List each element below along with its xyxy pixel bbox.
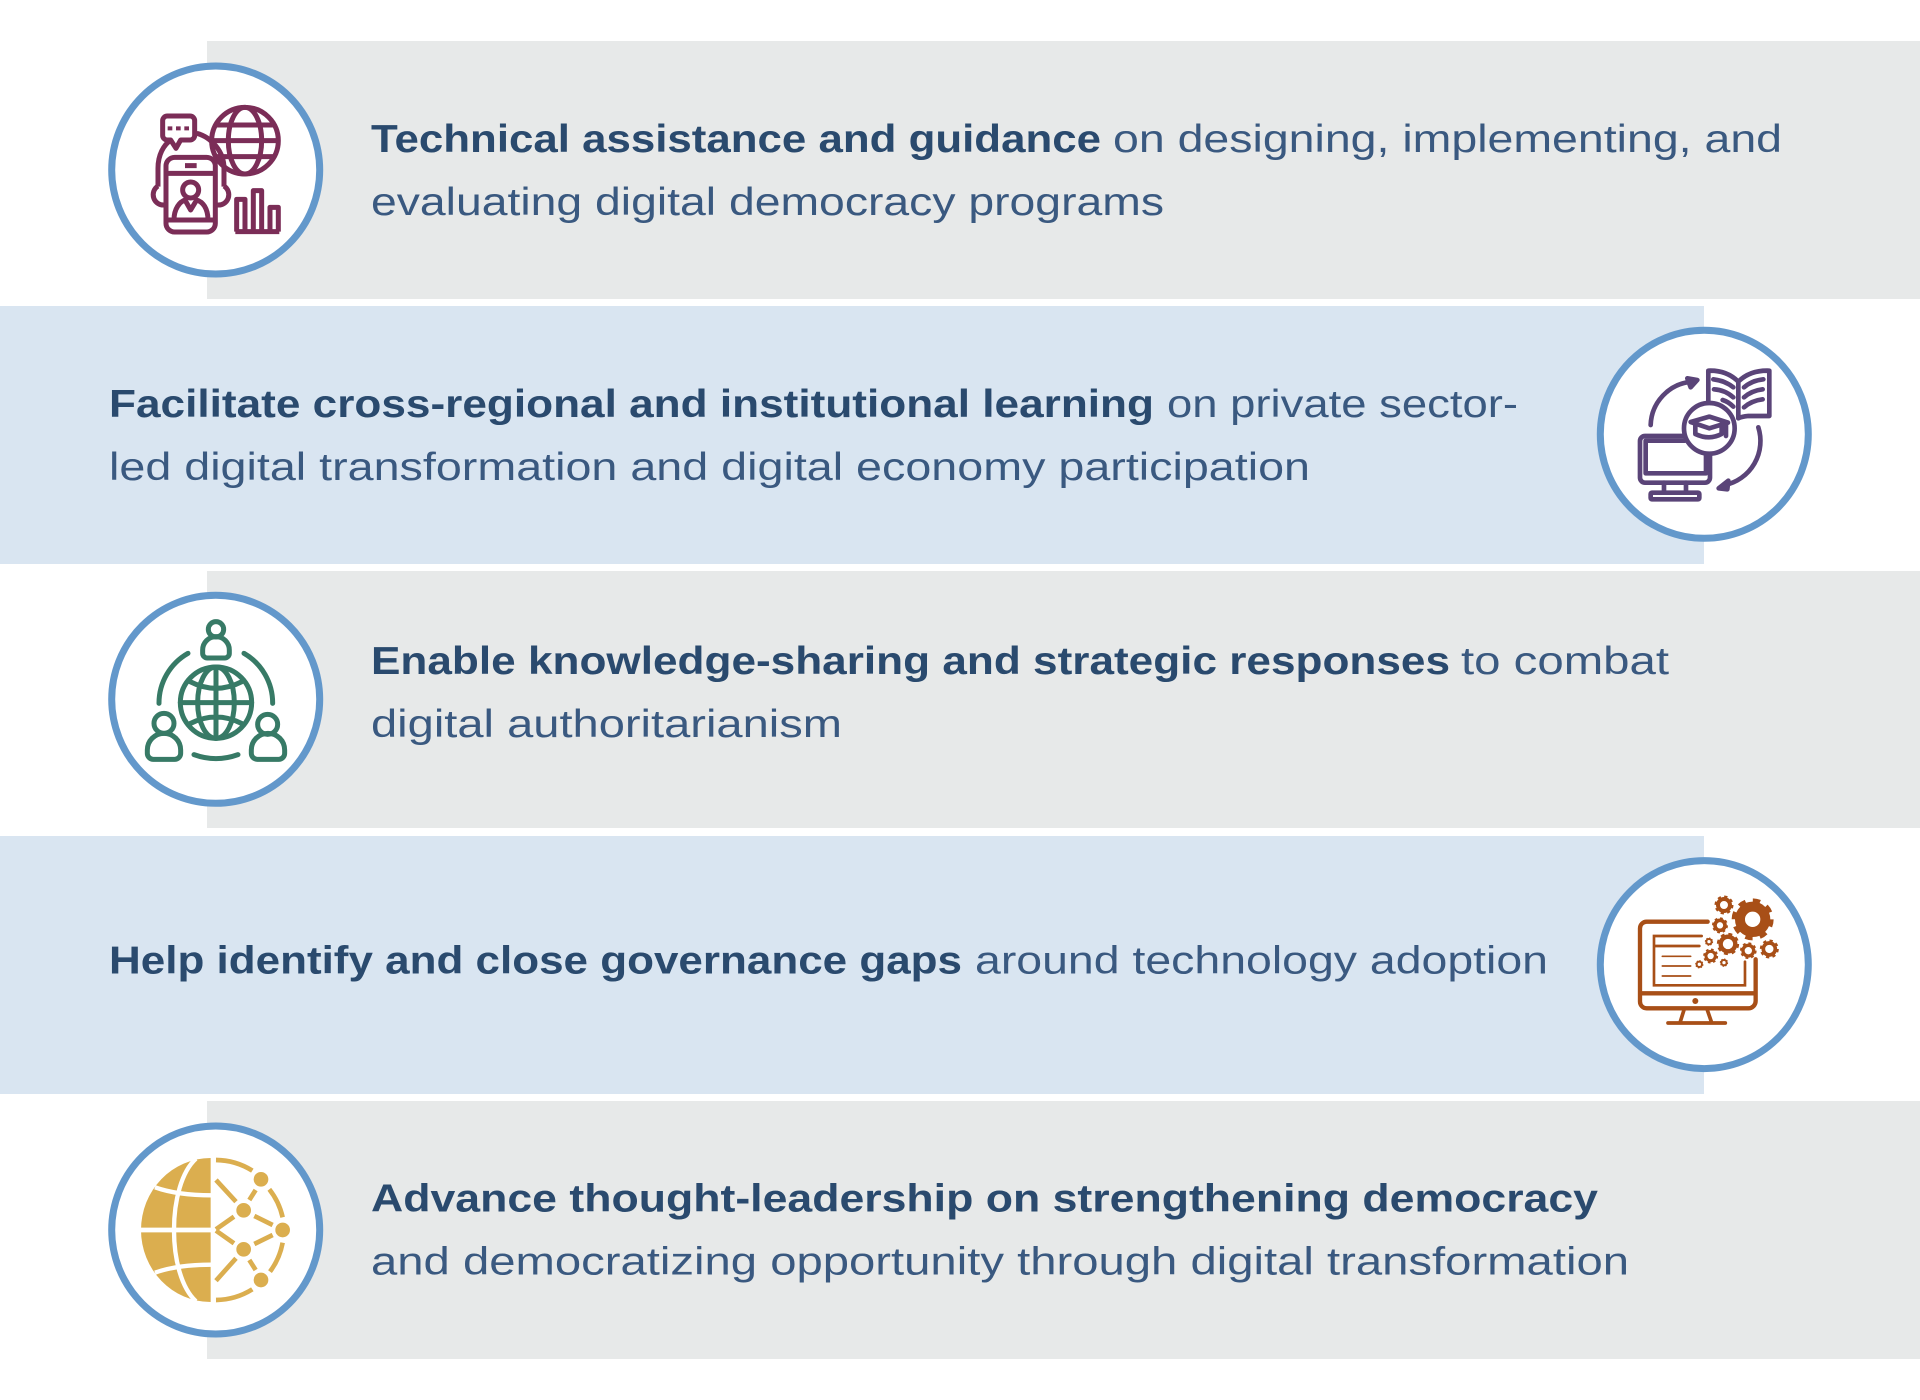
text: thought-leadership: Advance thought-leadership on strengthening democracy (371, 1178, 1599, 1220)
text: knowledge-sharing: Enable knowledge-sharing and strategic responses (371, 640, 1450, 683)
band: grey row 3 (207, 571, 1920, 828)
text: cross-regional learning (109, 383, 1518, 489)
text: cross-regional learning: on private sector- (1167, 383, 1518, 426)
icon ring 1 (112, 66, 320, 274)
text: technical assistance (371, 118, 1782, 224)
band: grey row 1 (207, 41, 1920, 299)
band: grey row 5 (207, 1101, 1920, 1359)
icon: people around globe (147, 622, 285, 759)
icon: phone, globe and bar chart (153, 107, 279, 232)
icon ring 3 (112, 595, 320, 803)
icon: monitor with gears (1640, 897, 1778, 1023)
icon: monitor, book and graduation cap (1640, 371, 1769, 499)
band: blue row 2 (0, 306, 1704, 564)
panel: thought-leadership (112, 1101, 1920, 1359)
band: blue row 4 (0, 836, 1704, 1094)
text: technical assistance: Technical assistance and guidance (371, 118, 1101, 161)
text: knowledge-sharing: to combat (1461, 640, 1669, 683)
text: thought-leadership (371, 1178, 1629, 1284)
text: cross-regional learning: led digital transformation and digital economy participation (109, 446, 1310, 489)
text: knowledge-sharing: digital authoritarianism (371, 703, 842, 746)
text: knowledge-sharing (371, 640, 1669, 746)
text: governance gaps (109, 940, 1548, 982)
text: governance gaps: Help identify and close governance gaps (109, 940, 962, 982)
text: technical assistance: evaluating digital democracy programs (371, 181, 1164, 224)
panel: technical assistance (112, 41, 1920, 299)
icon: half globe with network (140, 1158, 290, 1302)
text: cross-regional learning: Facilitate cross-regional and institutional learning (109, 383, 1154, 426)
text: technical assistance: on designing, implementing, and (1113, 118, 1782, 161)
panel: knowledge-sharing (112, 571, 1920, 828)
text: governance gaps: around technology adoption (975, 940, 1548, 982)
text: thought-leadership: and democratizing opportunity through digital transformation (371, 1240, 1629, 1284)
panel: governance gaps (0, 836, 1808, 1094)
icon ring 4 (1600, 861, 1808, 1069)
icon ring 5 (112, 1126, 320, 1334)
icon ring 2 (1600, 330, 1808, 538)
panel: cross-regional learning (0, 306, 1808, 564)
